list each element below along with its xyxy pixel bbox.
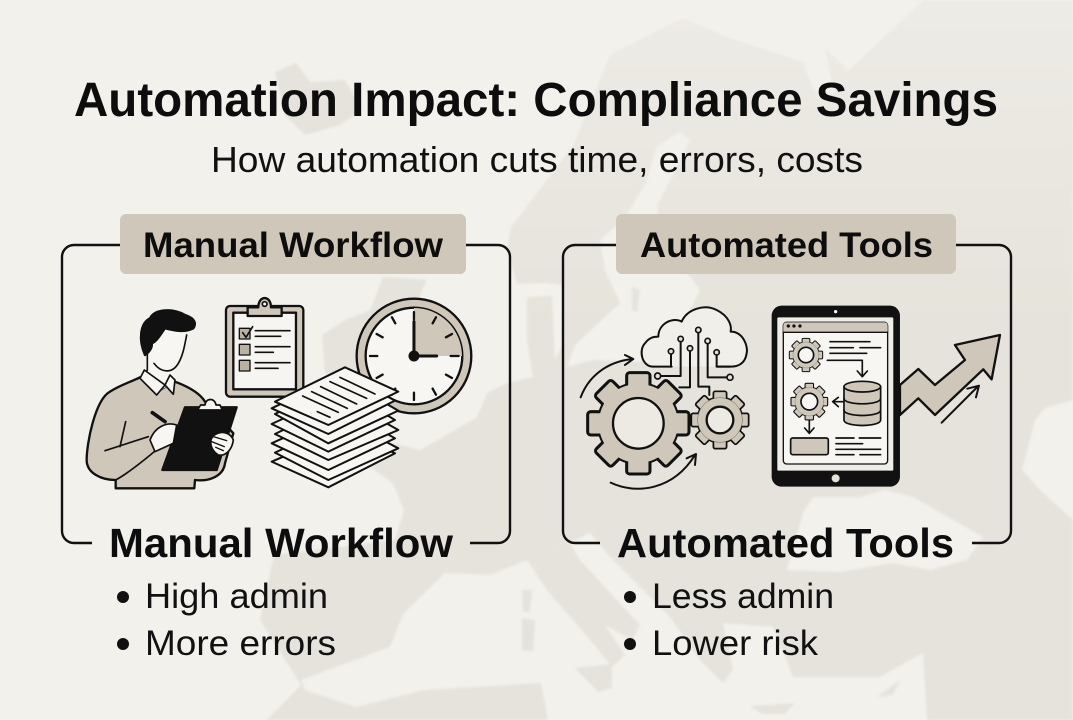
map of Europe backdrop: [260, 0, 1073, 720]
panel tag: [120, 214, 466, 274]
title: Automation Impact: Compliance Savings: [74, 74, 998, 127]
manual workflow illustration: [87, 298, 471, 488]
icon: clipboard checklist: [226, 298, 303, 397]
icon: small gear: [691, 391, 749, 449]
panel heading: Manual Workflow: [109, 520, 453, 566]
panel tag: Manual Workflow: [143, 226, 444, 265]
bullet list: More errors: [145, 624, 336, 663]
icon: stack of papers: [272, 367, 398, 487]
panel: manual workflow: [62, 214, 510, 663]
icon: large gear: [588, 373, 689, 474]
icon: person with clipboard: [87, 310, 237, 488]
bullet list: [117, 577, 336, 663]
icon: rotation arrows: [581, 355, 979, 489]
bullet list: [624, 577, 834, 663]
icon: tablet: [772, 306, 900, 487]
bullet list: Lower risk: [652, 624, 819, 663]
automated tools illustration: [581, 306, 1000, 489]
panel: automated tools: [563, 214, 1011, 663]
panel frame: [563, 245, 1011, 543]
bullet list: High admin: [145, 577, 328, 616]
panel heading: Automated Tools: [617, 520, 954, 566]
panel tag: [616, 214, 956, 274]
icon: cloud circuit: [642, 307, 747, 395]
panel frame: [62, 245, 510, 543]
icon: growth arrow: [900, 335, 1000, 415]
bullet list: Less admin: [652, 577, 834, 616]
panel tag: Automated Tools: [640, 226, 933, 265]
icon: clock: [357, 299, 471, 413]
subtitle: How automation cuts time, errors, costs: [211, 139, 863, 180]
